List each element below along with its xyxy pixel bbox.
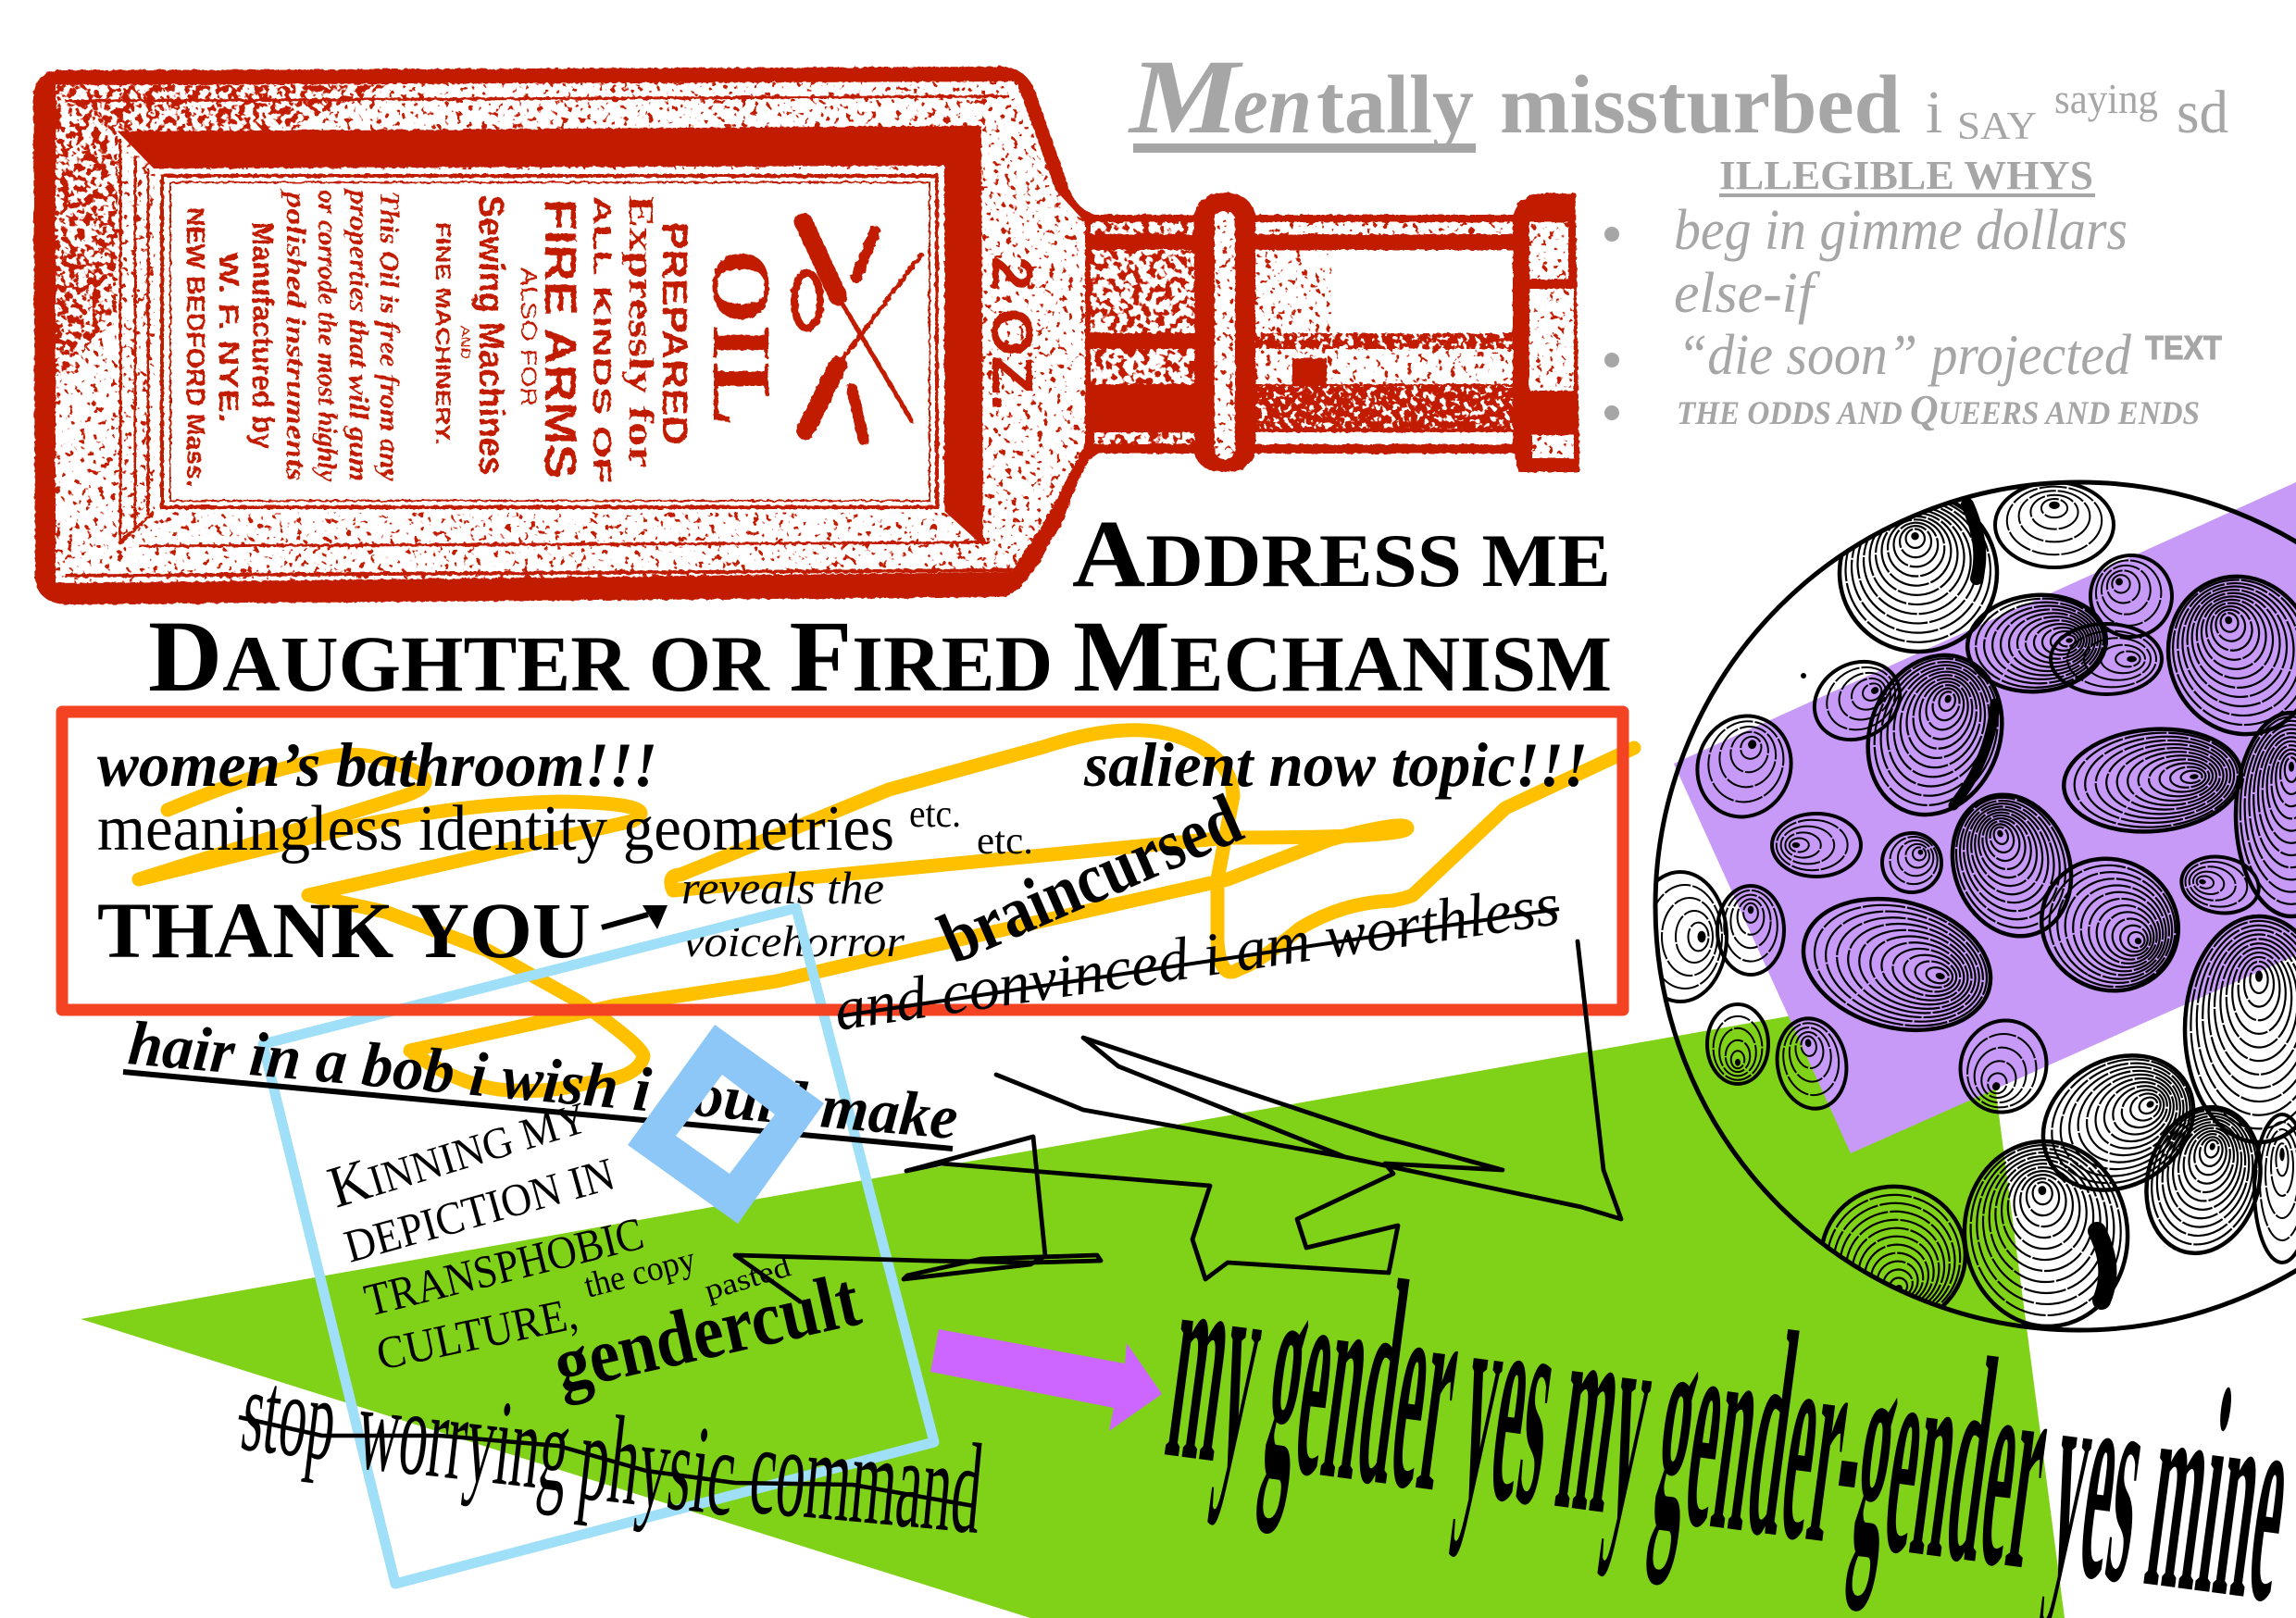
title: Mentally missturbed: M: [1128, 38, 1243, 156]
illustration: circle of shells: [1634, 482, 2296, 1337]
label text: Manufactured by: [246, 222, 280, 449]
label text: ALL KINDS OF: [588, 195, 617, 483]
illustration: red oil bottle: [33, 67, 1579, 604]
text: thank you: THANK YOU: [97, 886, 591, 975]
label text: properties that will gum: [343, 187, 374, 481]
panel: light blue tilted frame: [263, 908, 934, 1584]
label text: This Oil is free from any: [374, 192, 405, 482]
text: stop worrying physic command: physic: [573, 1388, 743, 1543]
shell group: [1634, 482, 2296, 1337]
inner frame: [118, 126, 983, 546]
title: Mentally missturbed: en: [1233, 59, 1312, 151]
text: meaningless identity geometries: meaningless identity geometries: [97, 793, 894, 865]
arrow: pink: [930, 1329, 1162, 1431]
label text: [181, 187, 787, 487]
text: voicehorror: voicehorror: [683, 917, 905, 966]
text: kinning block: [320, 1080, 794, 1380]
label text: OIL: [695, 249, 787, 426]
text: command: [744, 1398, 988, 1562]
bullet list: THE ODDS AND QUEERS AND ENDS: [1677, 386, 2200, 433]
text: stop worrying physic command: stop: [236, 1344, 343, 1486]
title: Mentally missturbed: tally: [1316, 59, 1474, 151]
purple polygon: [1674, 482, 2296, 1153]
label text: FINE MACHINERY.: [431, 222, 455, 445]
text: kinning block: TRANSPHOBIC: [359, 1207, 649, 1326]
text: reveals the: reveals the: [681, 862, 884, 914]
label text: Expressly for: [621, 195, 660, 467]
text: struck through worthless: and convinced i am worthless: [830, 870, 1564, 1044]
text: women's bathroom: women’s bathroom!!!: [97, 729, 657, 800]
text: kinning block: pasted: [701, 1249, 794, 1307]
text: salient now topic: salient now topic!!!: [1083, 729, 1588, 800]
label text: PREPARED: [655, 222, 693, 445]
title: Mentally missturbed: SAY: [1957, 106, 2037, 148]
label text: or corrode the most highly: [312, 190, 343, 482]
text: hair in a bob: hair in a bob i wish i could make: [126, 1007, 961, 1152]
bullet list: else-if: [1674, 262, 1821, 325]
heading: daughter or fired mechanism: DAUGHTER OR FIRED MECHANISM: [148, 600, 1612, 713]
label text: NEW BEDFORD Mass.: [181, 207, 210, 487]
icon: blue diamond ring: [628, 1025, 824, 1224]
green polygon: [81, 981, 2065, 1618]
text: braincursed: braincursed: [928, 778, 1253, 979]
text: kinning block: DEPICTION IN: [339, 1147, 620, 1273]
bottle silhouette: [33, 67, 1579, 604]
arrow: black small: [602, 905, 668, 929]
heading: address me: ADDRESS ME: [1072, 501, 1611, 607]
icon: crossed rifles: [794, 222, 921, 440]
text: etc second: etc.: [977, 820, 1033, 863]
text: gendercult: gendercult: [546, 1256, 867, 1409]
title: Mentally missturbed: missturbed: [1500, 59, 1901, 151]
label panel: [155, 169, 943, 513]
label text: Sewing Machines: [471, 195, 510, 475]
bullet list: TEXT: [2145, 329, 2222, 367]
label text: W. F. NYE.: [213, 253, 243, 422]
bullet list: [1604, 199, 2222, 433]
bottle interior: [56, 81, 1085, 583]
label text: polished instruments: [281, 188, 311, 481]
neck of bottle: [1091, 215, 1576, 458]
scribble: yellow: [139, 730, 1634, 1090]
label text: AND: [458, 326, 473, 359]
title: Mentally missturbed: saying: [2054, 75, 2158, 122]
bottle size mark: 2 OZ.: [980, 256, 1043, 411]
label text: FIRE ARMS: [535, 199, 584, 479]
text: kinning block: KINNING MY: [320, 1080, 594, 1220]
scribble: black: [735, 941, 1621, 1301]
title: Mentally missturbed: [1128, 38, 2228, 156]
text: stop worrying physic command: worrying: [352, 1359, 577, 1518]
panel: red frame: [62, 712, 1623, 1010]
title: Mentally missturbed: sd: [2177, 79, 2228, 146]
text: kinning block: the copy: [580, 1240, 699, 1306]
bullet list: “die soon” projected: [1678, 324, 2132, 387]
collar of bottle: [1215, 211, 1235, 459]
bullet list: beg in gimme dollars: [1674, 199, 2128, 262]
title: Mentally missturbed: i: [1926, 79, 1942, 146]
label text: ALSO FOR: [516, 268, 541, 407]
text: stop worrying physic command: [236, 1344, 988, 1562]
heading: illegible whys: ILLEGIBLE WHYS: [1719, 153, 2093, 198]
bottle speckle: [37, 74, 1088, 586]
text: etc: etc.: [909, 793, 961, 836]
text: kinning block: CULTURE,: [372, 1287, 581, 1380]
